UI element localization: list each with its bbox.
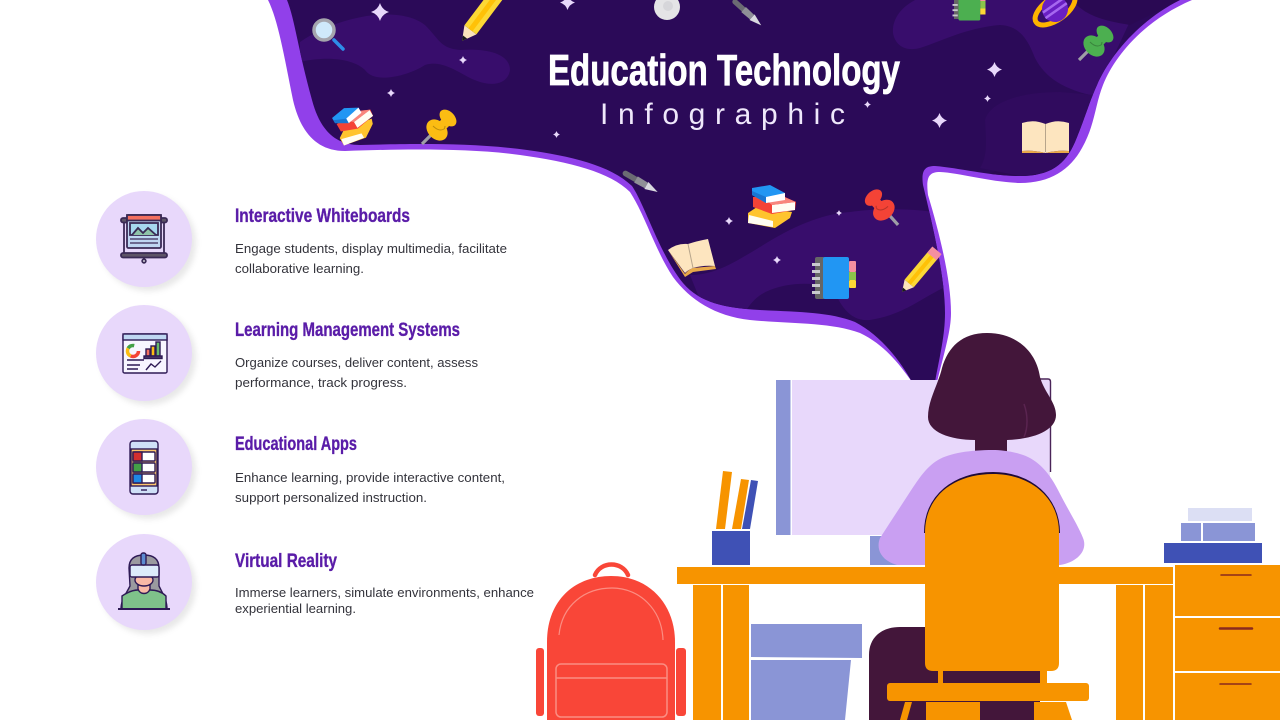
drawer handles	[1220, 575, 1252, 684]
icon: dashboard	[123, 334, 167, 373]
panel: list items	[96, 191, 534, 634]
body: support personalized instruction.	[235, 490, 427, 505]
person	[879, 333, 1084, 565]
illustration: desk scene	[536, 333, 1280, 720]
body: experiential learning.	[235, 601, 356, 616]
item: Virtual Reality	[96, 534, 534, 634]
heading: Interactive Whiteboards	[235, 205, 410, 227]
body: Enhance learning, provide interactive content,	[235, 470, 505, 485]
icon: whiteboard	[121, 215, 167, 263]
hair	[928, 333, 1056, 440]
item: Interactive Whiteboards	[96, 191, 507, 291]
icon: VR headset person	[118, 553, 170, 609]
title line 1: Education Technology	[548, 46, 900, 95]
circle	[96, 534, 196, 634]
storage box	[751, 624, 862, 720]
circle	[96, 191, 196, 291]
neck	[975, 430, 1007, 454]
icon: brush pen top	[730, 0, 764, 28]
icon: phone app	[130, 441, 158, 494]
book stack	[1164, 508, 1262, 563]
chair	[887, 473, 1089, 720]
icon: red pin	[860, 185, 900, 226]
icon: books middle	[748, 185, 796, 228]
icons: sparkles	[371, 0, 1002, 264]
icon: magnifier	[314, 20, 343, 49]
icon: pencil top	[456, 0, 509, 46]
icon: brush pen middle	[621, 169, 660, 195]
icon: green notebook	[952, 0, 986, 20]
icon: pencil bottom	[897, 246, 942, 296]
title	[548, 46, 900, 131]
pencil cup	[712, 471, 758, 565]
body: Immerse learners, simulate environments, enhance	[235, 585, 534, 600]
backpack	[536, 564, 686, 720]
item: Learning Management Systems	[96, 305, 478, 405]
body: Organize courses, deliver content, assess	[235, 355, 478, 370]
icon: books left	[328, 97, 381, 149]
darker blob accents	[990, 0, 1180, 180]
background blobs	[300, 0, 1140, 320]
desk	[677, 565, 1280, 720]
icon: yellow pin	[422, 106, 460, 145]
circle	[96, 419, 196, 519]
icon: open book left	[668, 239, 716, 277]
blob border	[268, 0, 1192, 382]
heading: Virtual Reality	[235, 550, 337, 572]
icon: green pin	[1079, 22, 1117, 61]
body: collaborative learning.	[235, 261, 364, 276]
person legs	[869, 627, 1040, 720]
circle	[96, 305, 196, 405]
heading: Educational Apps	[235, 433, 357, 455]
panel: purple sky blob	[268, 0, 1192, 382]
icon: blue notebook	[812, 257, 856, 299]
title line 2: Infographic	[600, 98, 845, 131]
icon: open book right	[1022, 121, 1069, 153]
blob fill	[287, 0, 1180, 382]
body: Engage students, display multimedia, facilitate	[235, 241, 507, 256]
heading: Learning Management Systems	[235, 319, 460, 341]
sweater	[879, 450, 1084, 565]
monitor	[776, 379, 1050, 565]
icon: moon	[654, 0, 680, 20]
item: Educational Apps	[96, 419, 505, 519]
icon: planet	[1029, 0, 1081, 33]
body: performance, track progress.	[235, 375, 407, 390]
